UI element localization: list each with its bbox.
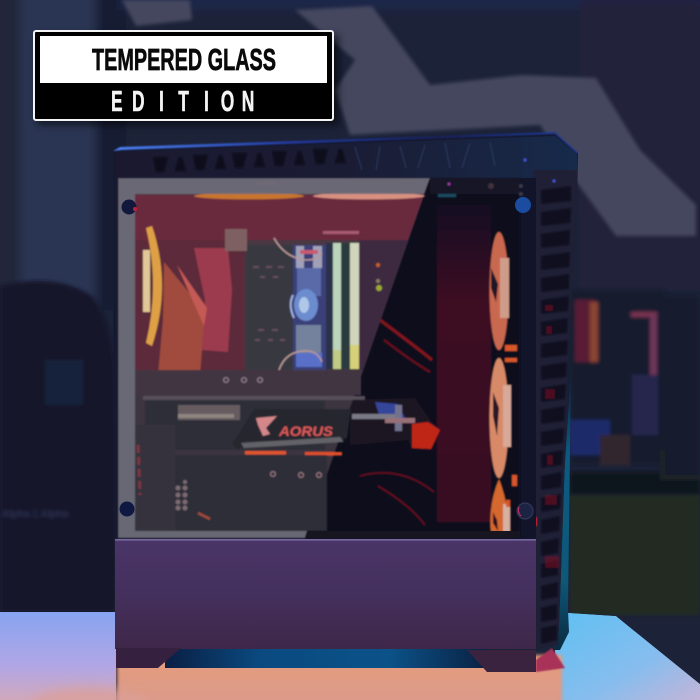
GPU power cables bbox=[350, 398, 440, 449]
lower motherboard bbox=[135, 425, 327, 531]
badge subheading: EDITION bbox=[111, 86, 254, 118]
front frame strip bbox=[518, 178, 536, 540]
lower front panel bbox=[115, 539, 536, 649]
blue RGB cooling fan bbox=[291, 245, 326, 370]
upper I/O strip bbox=[430, 178, 523, 197]
PC case bbox=[113, 132, 578, 672]
motherboard right part bbox=[359, 240, 408, 370]
right dark red shroud panel bbox=[437, 205, 491, 522]
red LED markers bbox=[531, 303, 537, 526]
RAM slot dark gaps bbox=[341, 243, 350, 369]
blue status lights bbox=[523, 158, 556, 183]
case top shell bbox=[113, 133, 578, 648]
top edge highlight bbox=[113, 132, 578, 154]
pale pipe top section bbox=[225, 229, 247, 251]
left rear fan ring bbox=[143, 226, 162, 346]
case underside glow bbox=[165, 646, 485, 668]
front vent panel with slats bbox=[531, 170, 577, 648]
RAM stick one bbox=[333, 243, 341, 369]
tempered glass tinted interior bbox=[118, 178, 430, 538]
red light strips bbox=[245, 451, 286, 454]
RAM stick two bbox=[350, 243, 359, 369]
right fan top bbox=[490, 232, 509, 350]
gaming chair silhouette: Alpha 1 Alpha bbox=[2, 509, 69, 520]
CPU heatsink bbox=[245, 245, 294, 370]
red heatsink fins bbox=[158, 262, 205, 375]
blue side panel edge bbox=[553, 370, 571, 650]
right fan middle bbox=[490, 358, 511, 478]
table bbox=[0, 612, 700, 700]
top red tick bbox=[257, 182, 277, 185]
lower board band bbox=[135, 370, 361, 395]
AORUS shroud plate bbox=[232, 409, 351, 450]
screw top left bbox=[122, 200, 137, 214]
red cables bbox=[360, 320, 434, 525]
glass diagonal dark clip strip bbox=[306, 531, 520, 538]
badge white panel bbox=[40, 36, 327, 83]
left foot bbox=[116, 648, 181, 668]
right fan bottom bbox=[490, 479, 510, 532]
right foot bbox=[467, 650, 536, 672]
glass left frame bbox=[118, 178, 430, 538]
AORUS logo wing bbox=[256, 416, 277, 436]
badge outer frame bbox=[34, 31, 333, 120]
pink strip bbox=[323, 231, 359, 234]
upper red reflection area bbox=[135, 195, 424, 240]
board LEDs bbox=[376, 263, 382, 291]
dark interior base bbox=[118, 178, 520, 538]
background monitor and neon lights bbox=[570, 290, 700, 615]
screw bottom left bbox=[120, 502, 134, 516]
interior behind glass bbox=[118, 178, 523, 538]
gaming chair silhouette bbox=[0, 281, 116, 612]
badge: tempered glass edition bbox=[34, 31, 339, 125]
graphics card bbox=[143, 396, 365, 456]
screw top right bbox=[515, 197, 531, 213]
hexagon wall decoration bbox=[122, 0, 696, 236]
curved white pipes bbox=[274, 238, 322, 370]
GPU heatsink fins bbox=[178, 405, 240, 420]
glass base bbox=[118, 178, 430, 538]
fan orange connectors bbox=[505, 345, 517, 507]
top panel with vents bbox=[116, 136, 577, 178]
GPU brand name: AORUS bbox=[278, 423, 334, 439]
badge heading: TEMPERED GLASS bbox=[92, 42, 276, 77]
top fan glow left bbox=[194, 193, 304, 199]
screw bottom right bbox=[517, 503, 533, 519]
top fan glow right bbox=[313, 193, 425, 199]
